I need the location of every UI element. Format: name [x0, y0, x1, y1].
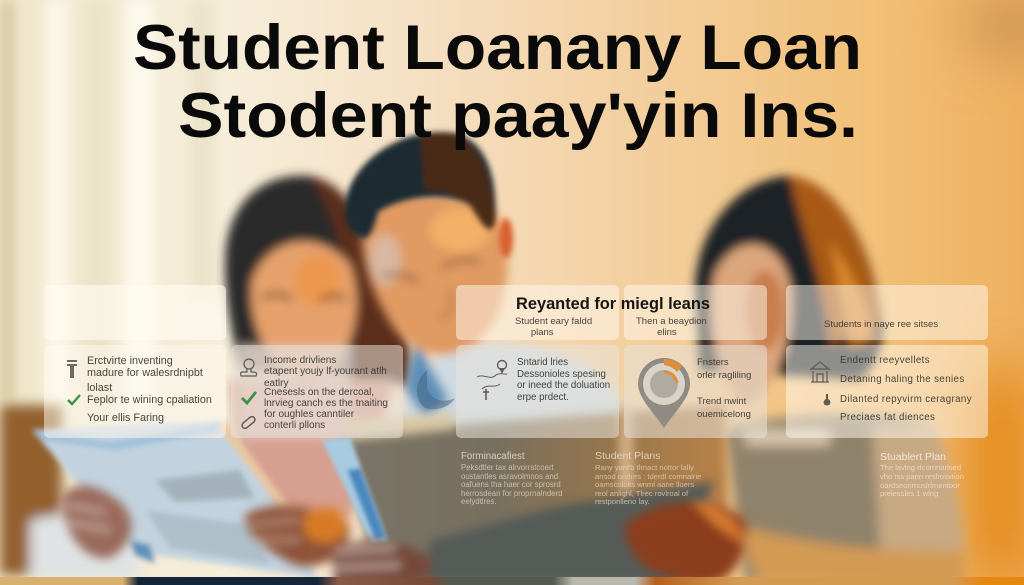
left woman [225, 176, 410, 520]
text: option lines: madure for walesrdnipbt [87, 367, 203, 379]
caption heading: Forminacafiest [461, 451, 525, 462]
text: income details: Cnesesls on the dercoal, [264, 387, 374, 398]
caption: student plans [595, 450, 701, 506]
text: income details [264, 387, 388, 431]
sofa and lower left [0, 405, 140, 578]
text: right line 1: Endentt reeyvellets [840, 355, 930, 366]
right woman [695, 176, 882, 405]
text: third option: Your ellis Faring [87, 412, 164, 424]
text: right line 2: Detaning haling the senies [840, 374, 965, 385]
caption body [461, 463, 562, 506]
text: then a payoff: Then a beaydion [636, 316, 707, 327]
text: standard plans lines: or ineed the doluation [517, 380, 610, 391]
panel: repayment options left [44, 345, 226, 438]
text: income details: conterli pllons [264, 420, 325, 431]
text: student early plans: Student eary faldd [515, 316, 592, 327]
text: students line: Students in naye ree sitses [824, 319, 938, 330]
panel: repayment header right half [624, 285, 767, 340]
icon: blue crescent behind panels [417, 370, 455, 410]
icon: route map [476, 360, 508, 400]
panel: repayment header left half [456, 285, 619, 340]
icon: small drop [824, 394, 830, 406]
text: option lines: Erctvirte inventing [87, 355, 173, 367]
icon: person [240, 358, 258, 377]
text: income lines: Income drivliens [264, 355, 336, 366]
bottom edge strip [0, 577, 1024, 585]
caption heading: Student Plans [595, 450, 660, 462]
centre man [362, 194, 625, 440]
text: then a payoff: elins [657, 326, 677, 338]
caption body: oardseonmoslrlmentoor [880, 481, 960, 490]
caption: forminacafiest [461, 451, 562, 506]
icon: paper clip [241, 416, 256, 430]
panel: fasters [624, 345, 767, 438]
text: standard plans lines: Dessonioles spesing [517, 368, 606, 380]
icon: location pin with dial [638, 358, 690, 428]
text: income details: lnrvieg canch es the tnaiting [264, 398, 388, 409]
icon: check mark [67, 394, 81, 406]
text: income lines [264, 355, 387, 389]
caption body: Peksdtler tax alrvorrstcoert [461, 463, 554, 472]
caption body: restponlleno lay. [595, 497, 650, 506]
text: trend lines: Trend nwint [697, 396, 746, 407]
caption body: eelydtlres. [461, 497, 497, 506]
text: income lines: etapent youjy lf-yourant atlh [264, 366, 387, 377]
text: second option: Feplor te wining cpaliation [87, 394, 212, 406]
text: student early plans [515, 316, 592, 338]
booklet left [32, 420, 318, 578]
caption body: herrosdean for proprnalnderd [461, 489, 562, 498]
text: student early plans: plans [531, 326, 554, 338]
caption body: oustantles asravolmnos and [461, 472, 558, 481]
caption body: oamscololts wnml aane lluers [595, 480, 694, 489]
title line 1: Student Loanany Loan [133, 13, 862, 83]
text: standard plans lines: Sntarid lries [517, 357, 568, 368]
text: income lines: eatlry [264, 378, 288, 389]
panel: right details [786, 345, 988, 438]
caption body: prelessles 1 wlng [880, 489, 938, 498]
icon: tool [67, 360, 77, 378]
text: short line: lolast [87, 382, 112, 394]
caption body: oafuens tha haer cor sprosrd [461, 480, 561, 489]
text: then a payoff [636, 316, 707, 338]
text: right line 4: Preciaes fat diences [840, 412, 935, 423]
caption body: ansod ondres : tderdl comnalrie [595, 472, 701, 481]
text: fasters lines [697, 357, 751, 380]
caption body: vho tss pann reslrosvtion [880, 472, 964, 481]
text: standard plans lines [517, 357, 610, 402]
text: option lines [87, 355, 203, 379]
panel: right header [786, 285, 988, 340]
text: fasters lines: orler ragliling [697, 370, 751, 380]
caption heading: Stuablert Plan [880, 451, 946, 463]
text: income details: for oughles canntiler [264, 409, 354, 420]
centre newspaper [340, 405, 728, 585]
text: trend lines [697, 396, 751, 420]
text: trend lines: ouemicelong [697, 408, 751, 420]
title [133, 13, 862, 150]
panel: empty header left [44, 285, 226, 340]
blue edge of centre paper [322, 437, 388, 545]
title line 2: Stodent paay'yin Ins. [178, 81, 858, 150]
caption body [880, 463, 964, 498]
hands [60, 485, 746, 585]
text: fasters lines: Fnsters [697, 357, 729, 368]
text: standard plans lines: erpe prdect. [517, 392, 569, 402]
panel: income driven [231, 345, 403, 438]
icon: house [810, 361, 830, 383]
heading: repayment: Reyanted for miegl leans [516, 295, 710, 313]
caption body: reol anlighl, Tlrec rovlroal of [595, 489, 688, 498]
caption body: Rany yanl'b tlrnact nottor lally [595, 463, 694, 472]
icon: check mark [241, 391, 257, 406]
caption body: The lavlng rtcomnarlsed [880, 463, 961, 472]
panel: standard plans [456, 345, 619, 438]
caption body [595, 463, 701, 506]
text: right line 3: Dilanted repyvirm ceragrany [840, 394, 972, 405]
caption: student plan right [880, 451, 964, 498]
